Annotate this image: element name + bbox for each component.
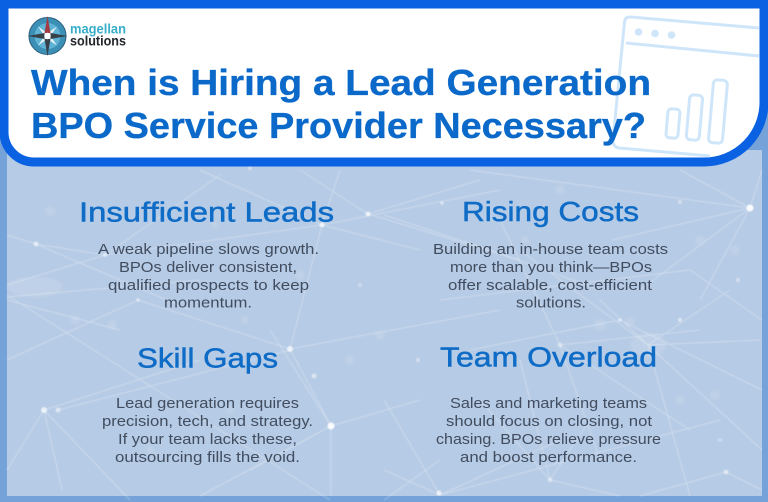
title: When is Hiring a Lead Generation: [31, 62, 651, 103]
title: [31, 62, 651, 146]
text block: and boost performance.: [460, 450, 637, 466]
text block: Lead generation requires: [116, 396, 299, 412]
text block: solutions.: [516, 296, 586, 312]
text block: Building an in-house team costs: [433, 242, 668, 258]
text block: chasing. BPOs relieve pressure: [436, 432, 661, 448]
heading: Team Overload: [440, 342, 657, 372]
text block: [102, 396, 313, 466]
icon: browser window with bar chart: [613, 17, 759, 156]
panel: Rising Costs: [433, 196, 668, 312]
text block: [98, 242, 319, 312]
logo wordmark: solutions: [70, 32, 126, 48]
logo: Magellan Solutions: [28, 16, 126, 56]
text block: BPOs deliver consistent,: [119, 260, 297, 276]
text block: should focus on closing, not: [446, 414, 652, 430]
text block: [433, 242, 668, 312]
text block: Sales and marketing teams: [450, 396, 647, 412]
heading: Rising Costs: [462, 196, 639, 227]
text block: qualified prospects to keep: [108, 278, 309, 294]
text block: A weak pipeline slows growth.: [98, 242, 319, 258]
panel: Team Overload: [436, 342, 661, 466]
text block: outsourcing fills the void.: [115, 450, 300, 466]
logo wordmark: [70, 20, 126, 48]
text block: offer scalable, cost-efficient: [448, 278, 652, 294]
header panel: [4, 4, 764, 162]
text block: momentum.: [164, 296, 252, 312]
logo wordmark: magellan: [70, 20, 126, 36]
text block: precision, tech, and strategy.: [102, 414, 313, 430]
title: BPO Service Provider Necessary?: [31, 105, 646, 146]
heading: Skill Gaps: [137, 342, 278, 374]
text block: more than you think—BPOs: [450, 260, 652, 276]
panel: Insufficient Leads: [79, 196, 334, 312]
panel: Skill Gaps: [102, 342, 313, 466]
heading: Insufficient Leads: [79, 196, 334, 228]
text block: If your team lacks these,: [118, 432, 297, 448]
icon: compass: [28, 16, 68, 56]
text block: [436, 396, 661, 466]
